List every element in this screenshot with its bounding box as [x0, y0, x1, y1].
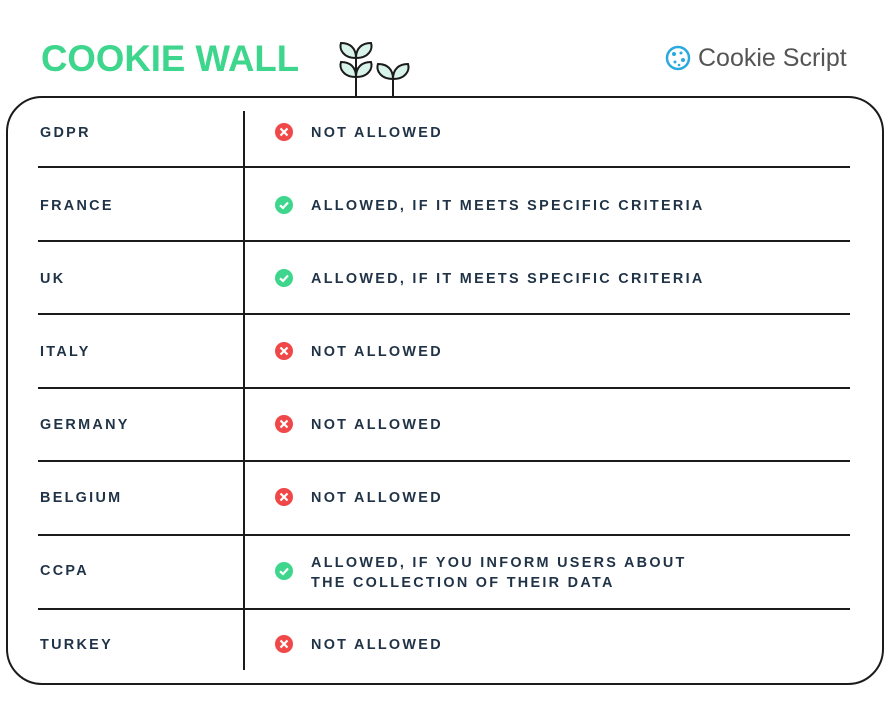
- row: GDPR: GDPR: [40, 125, 91, 141]
- row: TURKEY: NOT ALLOWED: [311, 637, 443, 653]
- row: ITALY: ITALY: [40, 344, 91, 360]
- row: FRANCE: FRANCE: [40, 198, 114, 214]
- logo: Cookie Script: Cookie Script: [698, 44, 847, 72]
- row: UK: ALLOWED, IF IT MEETS SPECIFIC CRITERIA: [311, 271, 705, 287]
- title: COOKIE WALL: [41, 38, 299, 79]
- row: ITALY: [40, 342, 443, 360]
- row: BELGIUM: [40, 488, 443, 506]
- row: ITALY: NOT ALLOWED: [311, 344, 443, 360]
- icon: plants: [339, 42, 410, 96]
- row: CCPA: ALLOWED, IF YOU INFORM USERS ABOUT: [311, 555, 687, 571]
- row: GDPR: [40, 123, 443, 141]
- row: GDPR: NOT ALLOWED: [311, 125, 443, 141]
- row: FRANCE: [40, 196, 705, 214]
- row: BELGIUM: BELGIUM: [40, 490, 122, 506]
- row: TURKEY: [40, 635, 443, 653]
- row: FRANCE: ALLOWED, IF IT MEETS SPECIFIC CRITERIA: [311, 198, 705, 214]
- row: CCPA: THE COLLECTION OF THEIR DATA: [311, 575, 615, 591]
- row: UK: [40, 269, 705, 287]
- row: GERMANY: [40, 415, 443, 433]
- row: CCPA: CCPA: [40, 563, 89, 579]
- row: BELGIUM: NOT ALLOWED: [311, 490, 443, 506]
- row: CCPA: [40, 555, 687, 591]
- row: GERMANY: NOT ALLOWED: [311, 417, 443, 433]
- row: TURKEY: TURKEY: [40, 637, 113, 653]
- row: UK: UK: [40, 271, 65, 287]
- row: GERMANY: GERMANY: [40, 417, 130, 433]
